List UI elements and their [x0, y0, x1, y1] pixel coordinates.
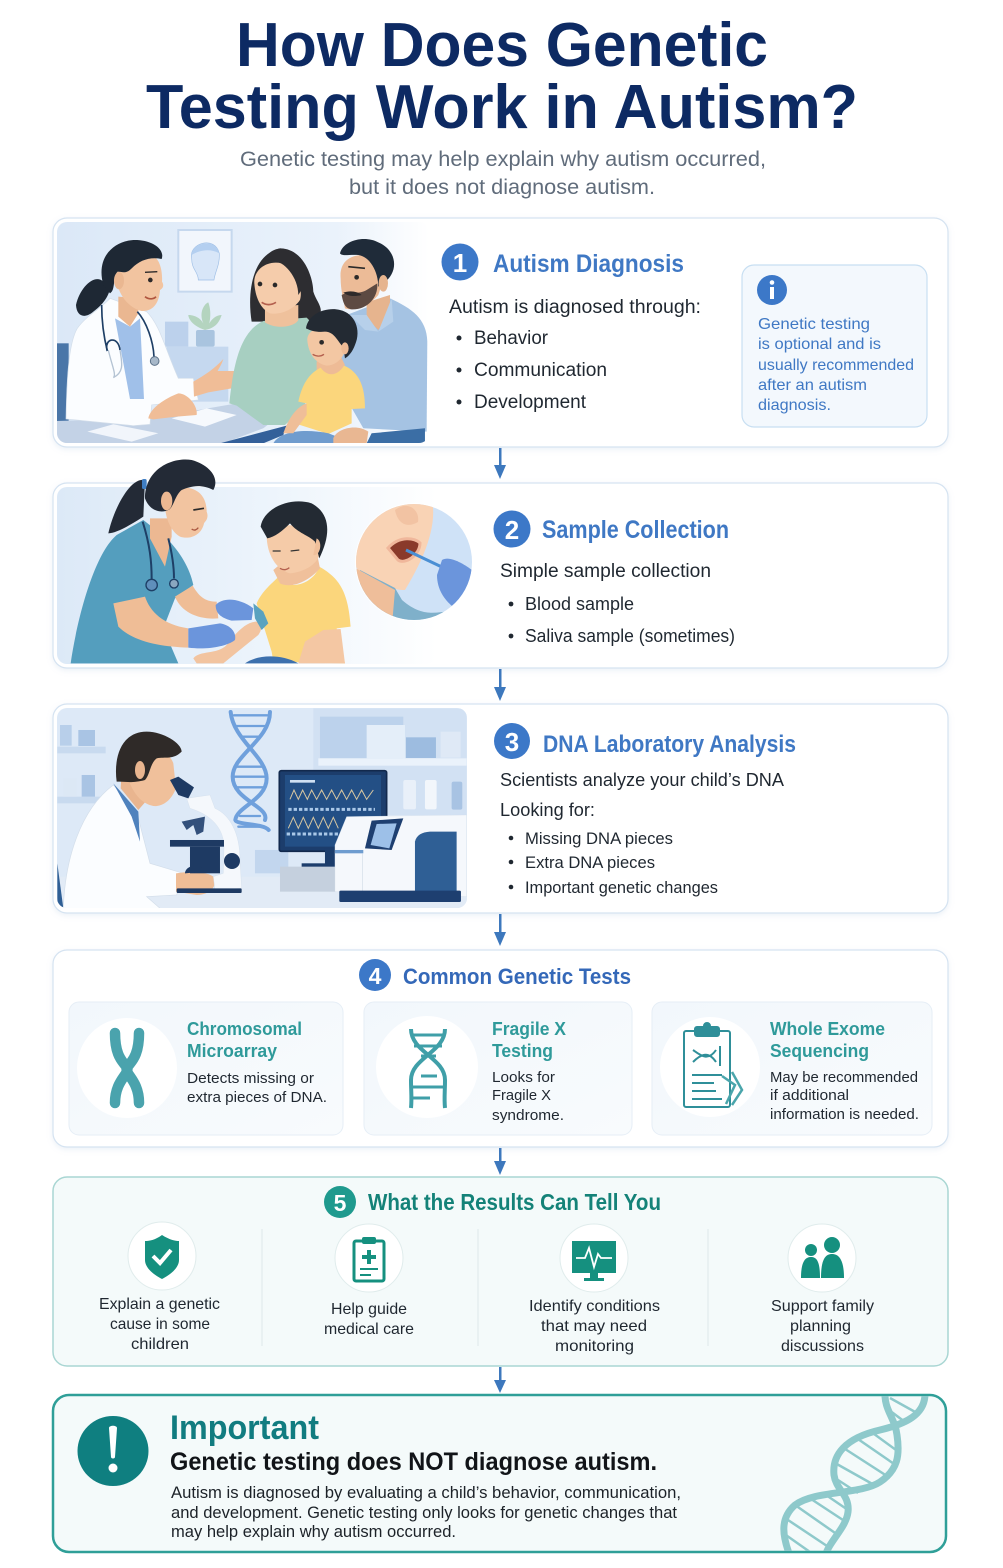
- step 4 heading: Common Genetic Tests: [403, 964, 631, 989]
- icon: shield: [128, 1222, 196, 1290]
- arrow 2 to 3: [494, 669, 506, 701]
- result text: [529, 1298, 660, 1355]
- sequencing machine: [335, 815, 467, 897]
- step 2 text: Saliva sample (sometimes): [525, 626, 735, 646]
- important body: Autism is diagnosed by evaluating a child’s behavior, communication,: [171, 1484, 681, 1502]
- card text: Fragile X: [492, 1087, 551, 1104]
- card text: [187, 1019, 327, 1106]
- step 2 badge: 2: [505, 515, 519, 545]
- callout text: diagnosis.: [758, 397, 831, 414]
- card text: syndrome.: [492, 1107, 564, 1124]
- step 2 heading: Sample Collection: [542, 516, 729, 544]
- step 5 badge: 5: [334, 1190, 347, 1216]
- important statement: Genetic testing does NOT diagnose autism.: [170, 1448, 657, 1476]
- result: genetic cause: [99, 1222, 220, 1353]
- callout text: usually recommended: [758, 357, 914, 374]
- result text: planning: [790, 1318, 851, 1335]
- card text: Testing: [492, 1041, 553, 1061]
- result: medical care: [324, 1224, 414, 1338]
- callout text: after an autism: [758, 377, 867, 394]
- icon: exclamation: [78, 1416, 148, 1486]
- icon: chromosome: [115, 1033, 139, 1103]
- result text: discussions: [781, 1338, 864, 1355]
- step 3 heading: DNA Laboratory Analysis: [543, 731, 796, 758]
- subtitle: Genetic testing may help explain why autism occurred,: [240, 147, 766, 171]
- panel: important: [53, 1392, 946, 1556]
- card text: information is needed.: [770, 1106, 919, 1123]
- step 1 text: Autism is diagnosed through:: [449, 297, 701, 318]
- callout text: is optional and is: [758, 336, 881, 353]
- result text: [771, 1298, 874, 1355]
- subtitle: [240, 147, 766, 199]
- step 3 text: [500, 769, 785, 897]
- scientist: [57, 863, 63, 908]
- step 2 badge: [494, 510, 530, 548]
- important heading: Important: [170, 1409, 319, 1447]
- card text: May be recommended: [770, 1069, 918, 1086]
- card text: [492, 1019, 566, 1124]
- result: family planning: [771, 1224, 874, 1355]
- step 1 text: Communication: [474, 360, 607, 381]
- icon: info: [757, 275, 787, 305]
- step 2 text: Blood sample: [525, 594, 634, 614]
- illustration: doctor with family: [57, 222, 429, 443]
- decoration: DNA helix: [783, 1392, 925, 1556]
- subtitle: but it does not diagnose autism.: [349, 175, 655, 199]
- card text: Microarray: [187, 1041, 277, 1061]
- panel 3: DNA laboratory analysis: [53, 704, 948, 913]
- title: [146, 11, 858, 142]
- result text: that may need: [541, 1318, 647, 1335]
- panel 5: what the results can tell you: [53, 1177, 948, 1366]
- panel 1: autism diagnosis: [53, 218, 948, 447]
- step 1 heading: Autism Diagnosis: [493, 250, 684, 278]
- card text: Whole Exome: [770, 1019, 885, 1039]
- result text: cause in some: [110, 1316, 210, 1333]
- arrow 4 to 5: [494, 1148, 506, 1175]
- step 1 text: [449, 297, 701, 413]
- icon: clipboard with DNA: [684, 1023, 742, 1107]
- result text: Explain a genetic: [99, 1296, 220, 1313]
- result: monitoring: [529, 1224, 660, 1355]
- step 1 text: Development: [474, 392, 587, 413]
- step 3 badge: 3: [505, 727, 519, 757]
- step 1 badge: [442, 244, 478, 280]
- step 3 text: Missing DNA pieces: [525, 830, 673, 848]
- card text: Chromosomal: [187, 1019, 302, 1039]
- card text: extra pieces of DNA.: [187, 1089, 327, 1106]
- illustration background: [57, 487, 437, 664]
- step 4 badge: 4: [369, 963, 382, 989]
- DNA helix: [231, 712, 270, 830]
- inset: saliva swab: [355, 504, 472, 620]
- card text: Looks for: [492, 1069, 555, 1086]
- card text: Detects missing or: [187, 1070, 314, 1087]
- arrow 3 to 4: [494, 914, 506, 946]
- step 3 text: Important genetic changes: [525, 879, 718, 897]
- card text: Fragile X: [492, 1019, 566, 1039]
- result text: [99, 1296, 220, 1353]
- step 1 badge: 1: [453, 248, 467, 278]
- callout text: [758, 316, 914, 414]
- icon: family: [788, 1224, 856, 1292]
- step 3 badge: [494, 723, 530, 759]
- card text: [770, 1019, 919, 1123]
- step 3 text: Scientists analyze your child’s DNA: [500, 769, 785, 790]
- arrow 5 to important: [494, 1367, 506, 1393]
- card: chromosomal microarray: [69, 1002, 343, 1135]
- illustration: nurse drawing blood from child: [71, 459, 351, 663]
- result text: [324, 1301, 414, 1338]
- card: fragile x testing: [364, 1002, 632, 1135]
- callout: optional testing: [742, 265, 927, 427]
- result text: Identify conditions: [529, 1298, 660, 1315]
- step 4 badge: [359, 959, 391, 991]
- result text: Help guide: [331, 1301, 407, 1318]
- step 3 text: Looking for:: [500, 799, 595, 820]
- callout text: Genetic testing: [758, 316, 870, 333]
- step 2 text: Simple sample collection: [500, 561, 711, 582]
- arrow 1 to 2: [494, 448, 506, 479]
- result text: monitoring: [555, 1338, 634, 1355]
- illustration: scientist at microscope: [57, 708, 467, 910]
- step 2 text: [500, 561, 735, 646]
- microscope: [187, 795, 242, 890]
- card text: Sequencing: [770, 1041, 869, 1061]
- card text: if additional: [770, 1087, 849, 1104]
- card: whole exome sequencing: [652, 1002, 932, 1135]
- icon: monitor: [560, 1224, 628, 1292]
- icon: DNA: [411, 1029, 445, 1108]
- result text: children: [131, 1336, 189, 1353]
- result text: Support family: [771, 1298, 874, 1315]
- important body: may help explain why autism occurred.: [171, 1523, 456, 1541]
- step 5 badge: [324, 1186, 356, 1218]
- title: How Does Genetic: [236, 11, 768, 80]
- monitor: [279, 771, 387, 851]
- panel 2: sample collection: [53, 459, 948, 668]
- icon: clipboard: [335, 1224, 403, 1292]
- result text: medical care: [324, 1321, 414, 1338]
- panel 4: common genetic tests: [53, 950, 948, 1147]
- title: Testing Work in Autism?: [146, 73, 858, 142]
- important body: [171, 1484, 681, 1541]
- step 1 text: Behavior: [474, 328, 549, 349]
- important body: and development. Genetic testing only looks for genetic changes that: [171, 1504, 677, 1522]
- step 3 text: Extra DNA pieces: [525, 854, 655, 872]
- step 5 heading: What the Results Can Tell You: [368, 1189, 661, 1215]
